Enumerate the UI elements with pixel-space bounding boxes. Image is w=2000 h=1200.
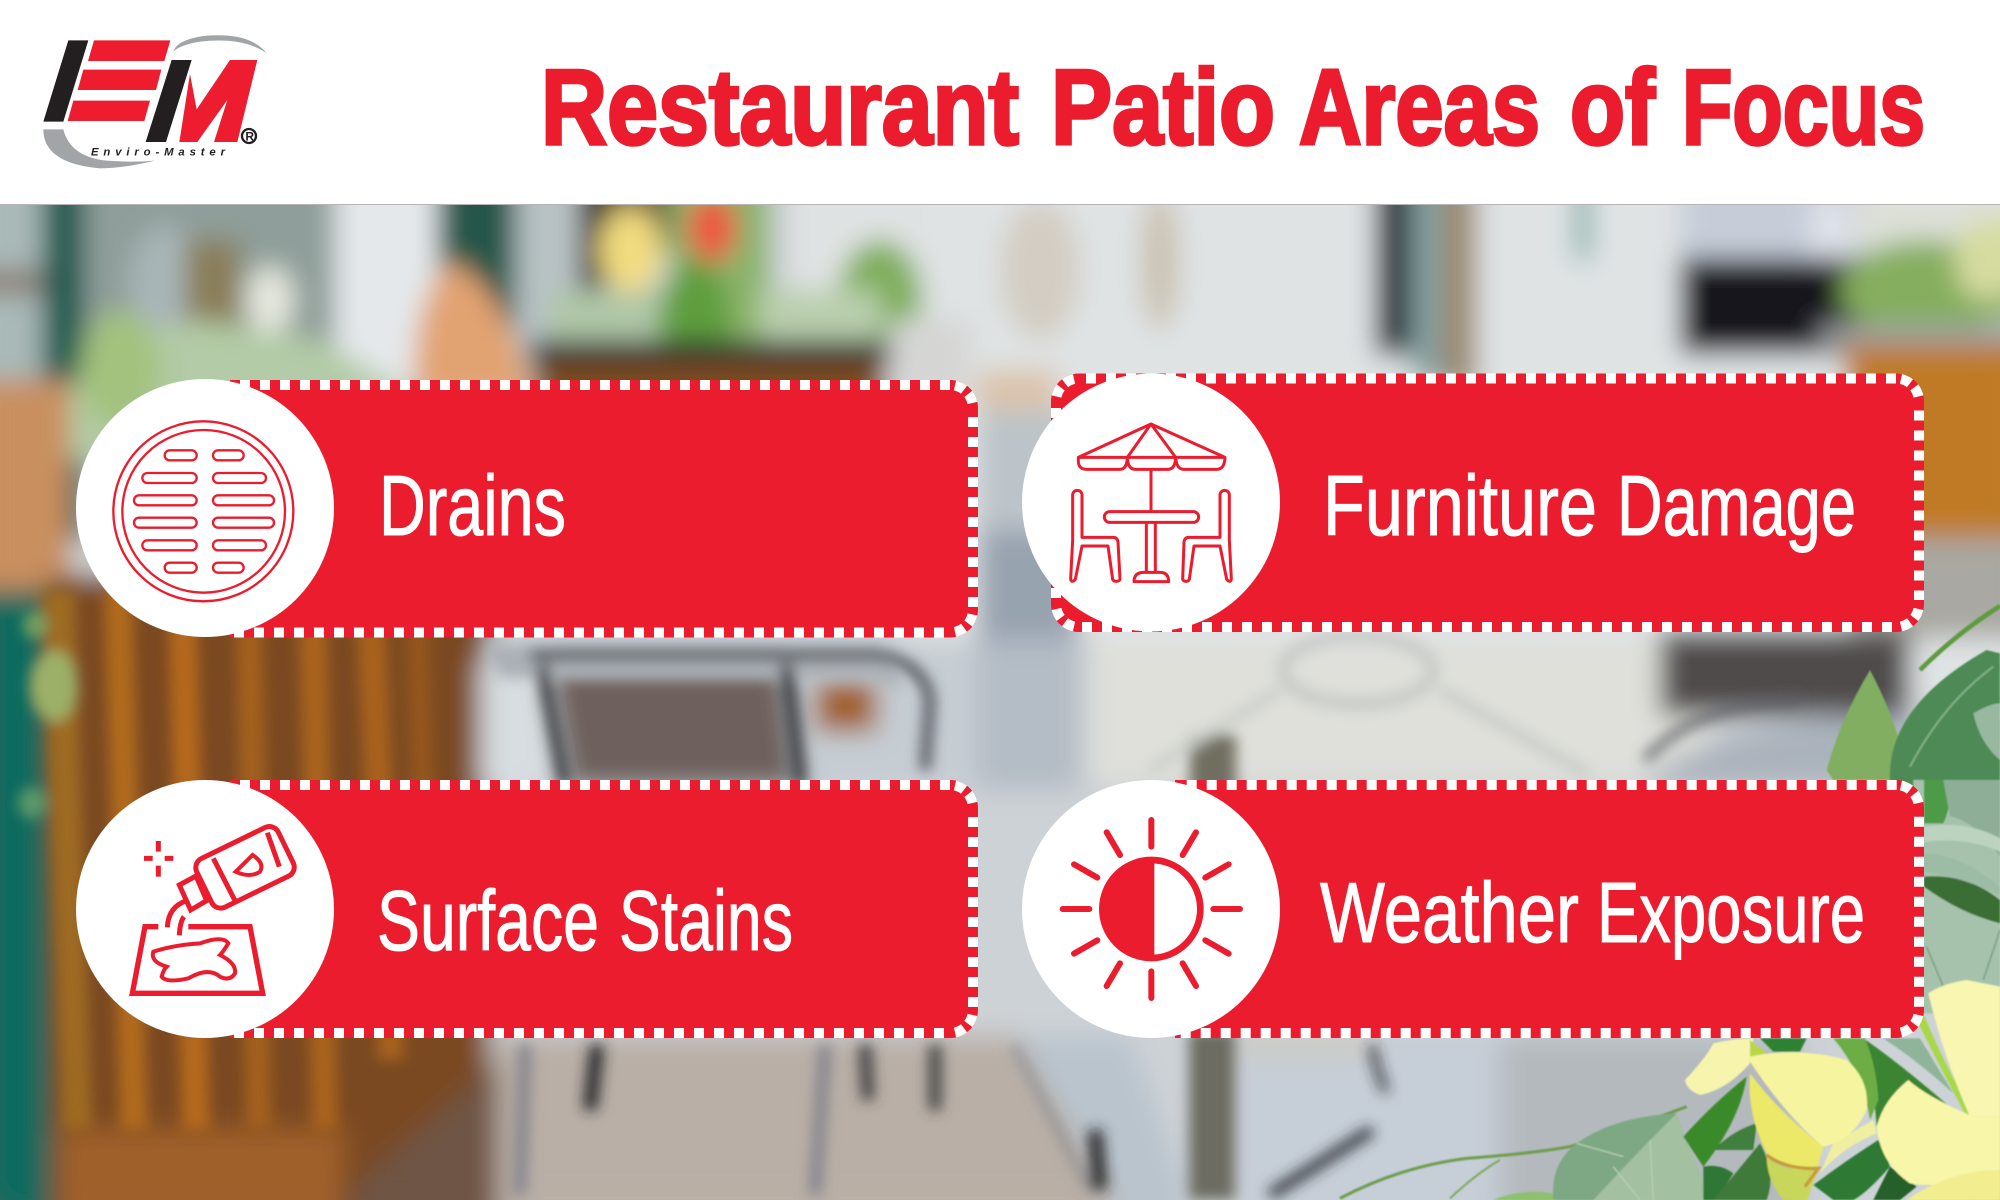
header bar (0, 0, 2000, 204)
panel: Surface Stains (76, 780, 978, 1038)
panel: Drains (76, 379, 978, 638)
title: Patio (1051, 47, 1275, 167)
title: Areas (1299, 47, 1540, 167)
logo: Enviro-Master: R (245, 129, 254, 143)
label: Weather Exposure (1320, 866, 1865, 961)
label: Furniture Damage (1323, 459, 1856, 554)
icon circle: patio table and umbrella (1022, 374, 1280, 632)
label: Weather Exposure: Weather (1320, 866, 1579, 961)
panel: Furniture Damage (1022, 374, 1924, 632)
title (541, 47, 1925, 167)
title: Restaurant (541, 47, 1019, 167)
label: Surface Stains: Surface (377, 874, 599, 969)
logo: Enviro-Master: Enviro-Master (91, 146, 226, 158)
logo: Enviro-Master (43, 35, 267, 168)
icon circle: drain (76, 379, 334, 637)
label: Drains: Drains (379, 459, 566, 554)
label: Surface Stains: Stains (619, 874, 793, 969)
label: Furniture Damage: Damage (1617, 459, 1856, 554)
panel: Weather Exposure (1022, 780, 1924, 1038)
label: Furniture Damage: Furniture (1323, 459, 1597, 554)
icon circle: bottle pouring on a stain (76, 780, 334, 1038)
title: of (1570, 47, 1655, 167)
foreground plant with yellow flowers (1340, 606, 2000, 1200)
label: Weather Exposure: Exposure (1597, 866, 1865, 961)
icon circle: half sun (1022, 780, 1280, 1038)
title: Focus (1682, 47, 1925, 167)
